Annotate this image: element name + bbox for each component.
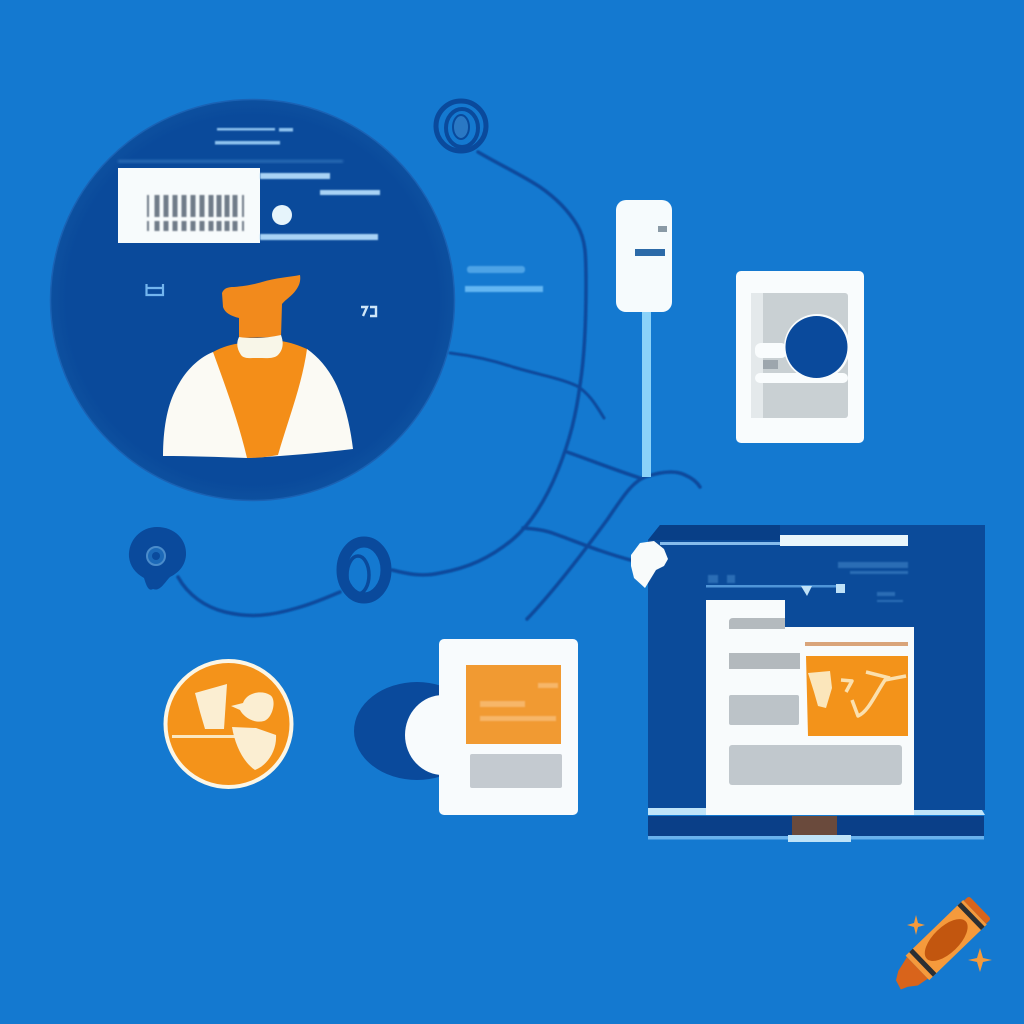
figure collar xyxy=(237,335,283,358)
grey row wide xyxy=(729,745,902,785)
side text lines xyxy=(465,266,543,292)
grey row top xyxy=(729,618,785,629)
monitor screen xyxy=(648,525,985,810)
icon: plug device xyxy=(616,200,672,477)
device indicator xyxy=(658,226,667,232)
device slot xyxy=(635,249,665,256)
monitor nav line xyxy=(706,585,836,588)
panel: monitor xyxy=(648,525,985,842)
orange chart panel xyxy=(806,656,908,736)
node: top swirl xyxy=(436,101,486,151)
document blue dot xyxy=(786,316,848,378)
monitor document xyxy=(706,600,914,815)
faint rule xyxy=(118,160,343,162)
document label bars xyxy=(755,314,850,383)
monitor base band xyxy=(648,816,984,836)
card: orange document xyxy=(354,639,578,815)
card: profile document xyxy=(736,271,864,443)
badge rule xyxy=(172,735,254,738)
logo: crayon xyxy=(886,895,992,999)
panel: profile circle xyxy=(50,100,454,500)
document sheet xyxy=(706,600,914,815)
connector lines xyxy=(178,152,700,619)
crayon label xyxy=(918,912,975,968)
icon: small bracket left xyxy=(146,284,163,295)
orange rule xyxy=(805,642,908,646)
monitor shelf xyxy=(648,808,985,815)
badge shield xyxy=(232,727,276,770)
small dot xyxy=(272,205,292,225)
sparkle small xyxy=(907,915,925,935)
figure: person xyxy=(163,275,353,458)
card side labels xyxy=(260,173,380,240)
chart curve xyxy=(841,672,906,716)
connector pin xyxy=(631,541,668,588)
document sheet xyxy=(736,271,864,443)
figure vest xyxy=(213,341,307,458)
card image lines xyxy=(480,683,558,721)
device cable xyxy=(642,312,651,477)
figure coat xyxy=(163,349,353,458)
crayon band top xyxy=(957,902,985,930)
crayon bands xyxy=(909,949,936,977)
monitor pointer line xyxy=(660,542,780,545)
node: left target xyxy=(129,527,186,590)
card orange image xyxy=(466,665,561,744)
monitor nav markers xyxy=(801,584,845,596)
figure head xyxy=(222,275,300,338)
document pale strip xyxy=(751,293,763,418)
card sheet xyxy=(439,639,578,815)
icon: small glyph right xyxy=(361,307,376,316)
monitor faint subtitle xyxy=(708,562,908,602)
data card with bars xyxy=(118,168,260,243)
badge left figure xyxy=(195,684,227,729)
grey row two xyxy=(729,653,800,669)
monitor stand xyxy=(788,835,851,842)
white bump xyxy=(405,695,481,775)
disc background xyxy=(50,100,454,500)
document small grey tag xyxy=(763,360,778,369)
sparkle large xyxy=(968,948,992,972)
device body xyxy=(616,200,672,312)
dark blob behind card xyxy=(354,682,480,780)
crayon tip xyxy=(888,957,928,997)
badge: orange circle xyxy=(166,661,292,787)
grey row three xyxy=(729,695,799,725)
header text lines xyxy=(215,128,293,144)
badge disc xyxy=(166,661,292,787)
document image area xyxy=(751,293,848,418)
crayon end cap xyxy=(964,896,991,924)
crayon body xyxy=(906,900,987,980)
node: middle ring xyxy=(342,542,386,598)
monitor foot line xyxy=(648,836,984,840)
monitor stem xyxy=(792,816,837,836)
chart glyphs xyxy=(808,671,832,708)
monitor top shade xyxy=(648,525,780,540)
monitor title bar xyxy=(780,535,908,546)
badge right figure xyxy=(231,692,274,722)
card grey block xyxy=(470,754,562,788)
